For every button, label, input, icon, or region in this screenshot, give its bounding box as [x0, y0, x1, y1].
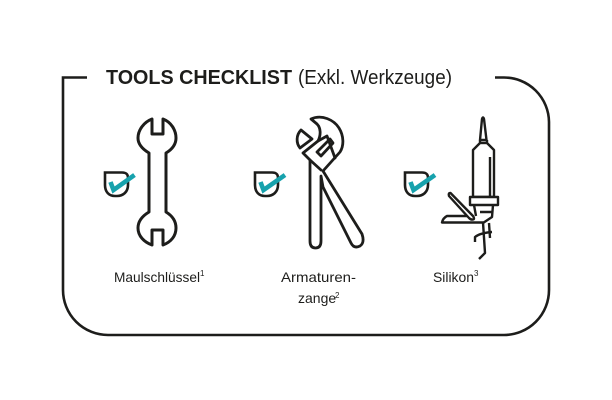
icon: silicone gun	[442, 118, 498, 259]
title: TOOLS CHECKLIST	[106, 67, 292, 89]
label: Silikon: Silikon	[433, 269, 474, 285]
label: Armaturenzange: 2	[335, 291, 340, 300]
label: Maulschlüssel: Maulschlüssel	[114, 269, 200, 285]
icon: water pump pliers	[297, 117, 363, 248]
icon: open-end wrench	[138, 119, 176, 245]
title: (Exkl. Werkzeuge)	[298, 67, 452, 89]
label: Maulschlüssel: 1	[200, 269, 205, 278]
panel frame	[63, 78, 549, 335]
icon: checkbox 3	[405, 172, 435, 196]
label: Armaturenzange: Armaturen-	[281, 269, 356, 285]
icon: checkbox 2	[255, 172, 285, 196]
label: Armaturenzange: zange	[298, 290, 336, 306]
icon: checkbox 1	[105, 172, 134, 196]
label: Silikon: 3	[474, 269, 479, 278]
